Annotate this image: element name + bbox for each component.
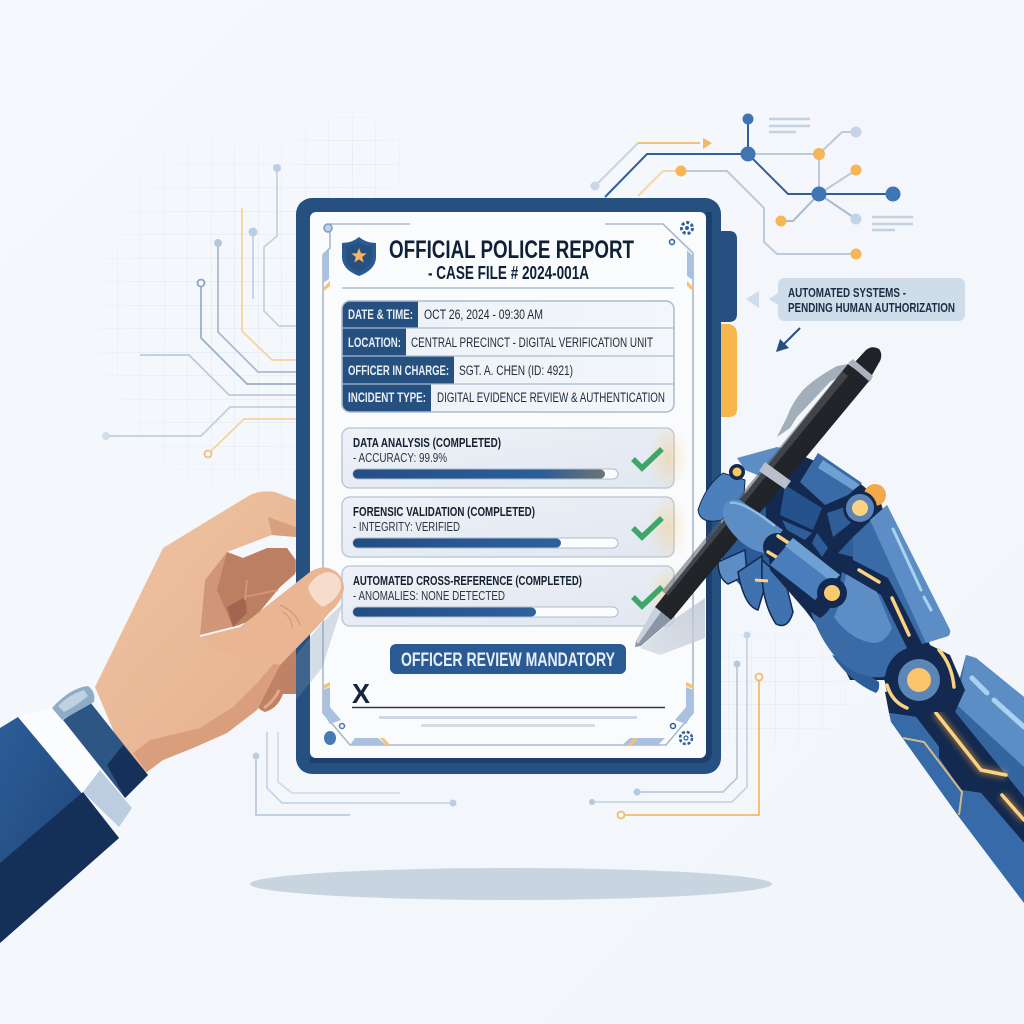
pen middle band <box>759 462 791 489</box>
elbow joint <box>885 646 953 714</box>
ground shadow <box>250 868 772 900</box>
back fingers <box>718 550 793 626</box>
finger underside <box>268 517 296 537</box>
fingers behind card <box>253 640 296 712</box>
card frame <box>296 198 721 774</box>
human hand and sleeve <box>0 491 344 943</box>
background grid: top <box>304 114 404 198</box>
palm cavity <box>200 548 296 635</box>
forearm upper plate <box>952 655 1024 797</box>
case file subtitle: - CASE FILE # 2024-001A <box>428 263 589 283</box>
thumb top skin <box>200 568 344 665</box>
circuit network: top right <box>590 114 913 260</box>
status panel: data analysis: DATA ANALYSIS (COMPLETED) <box>353 435 501 450</box>
pen nib <box>635 607 671 647</box>
card paper <box>310 212 706 758</box>
hand <box>95 491 344 772</box>
arrow: callout to pen <box>776 328 800 352</box>
pen shadow <box>640 598 705 655</box>
status panel: forensic validation <box>342 493 688 561</box>
forearm core <box>885 680 1024 843</box>
background grid: left <box>99 136 309 484</box>
status panel: data analysis: - ACCURACY: 99.9% <box>353 450 447 465</box>
shirt cuff <box>18 707 132 827</box>
front finger <box>723 500 847 608</box>
status panel: automated cross-reference: - ANOMALIES: NONE DETECTED <box>353 588 505 603</box>
details table: LOCATION: <box>348 335 401 350</box>
forearm circuit lights <box>936 713 1024 820</box>
pen barrel <box>655 364 870 620</box>
signature line <box>352 678 665 727</box>
upper thumb segment <box>698 473 745 521</box>
folder tabs <box>715 231 737 417</box>
thumb cast shadow <box>296 603 343 700</box>
icon: corner bug bottom left <box>324 724 344 745</box>
circuit lines: bottom <box>252 632 762 818</box>
decorative frame <box>323 224 693 745</box>
status panel: automated cross-reference <box>342 562 688 630</box>
officer review button: OFFICER REVIEW MANDATORY <box>401 650 615 671</box>
officer review button <box>390 644 626 674</box>
details table: INCIDENT TYPE: <box>348 390 426 405</box>
details table: OFFICER IN CHARGE: <box>348 363 449 378</box>
signature line: X <box>352 678 370 709</box>
background grid: lower right <box>721 637 850 743</box>
lower palm <box>811 572 907 677</box>
callout: automated systems <box>746 278 965 321</box>
icon: corner gear top right <box>670 222 692 244</box>
callout: automated systems: PENDING HUMAN AUTHORIZATION <box>788 300 955 315</box>
callout: automated systems: AUTOMATED SYSTEMS - <box>788 285 906 300</box>
details table: DATE & TIME: <box>348 307 413 322</box>
hand base <box>765 455 965 712</box>
thumbnail <box>308 572 341 607</box>
pen top ring <box>848 359 873 382</box>
robot arm <box>635 347 1024 903</box>
details table <box>342 301 674 412</box>
palm lip <box>832 655 879 693</box>
forearm lower plate <box>889 713 1024 903</box>
knuckle joint <box>864 484 886 506</box>
status panel: automated cross-reference: AUTOMATED CROSS-REFERENCE (COMPLETED) <box>353 573 582 588</box>
pen <box>635 347 881 647</box>
details table: SGT. A. CHEN (ID: 4921) <box>459 363 573 378</box>
sleeve <box>0 717 119 943</box>
details table: OCT 26, 2024 - 09:30 AM <box>424 307 543 322</box>
palm panels <box>800 453 862 505</box>
wristwatch <box>63 702 148 798</box>
finger base behind pen <box>722 500 790 590</box>
report card <box>296 198 721 774</box>
icon: corner gear bottom right <box>670 724 692 744</box>
icon: police badge <box>342 237 376 276</box>
details table: DIGITAL EVIDENCE REVIEW & AUTHENTICATION <box>437 390 665 405</box>
details table: CENTRAL PRECINCT - DIGITAL VERIFICATION UNIT <box>411 335 653 350</box>
circuit lines: left <box>102 164 298 458</box>
wrist lights <box>859 570 909 635</box>
title: OFFICIAL POLICE REPORT <box>389 236 634 264</box>
pen clip <box>777 364 848 437</box>
pen cap tip <box>855 347 881 375</box>
status panel: data analysis <box>342 424 688 492</box>
status panel: forensic validation: FORENSIC VALIDATION (COMPLETED) <box>353 504 535 519</box>
hand lower shade <box>133 660 280 772</box>
status panel: forensic validation: - INTEGRITY: VERIFIED <box>353 519 460 534</box>
forearm plate highlights <box>972 678 1024 727</box>
card inner shadow <box>310 212 712 763</box>
wrist plate <box>853 505 950 644</box>
